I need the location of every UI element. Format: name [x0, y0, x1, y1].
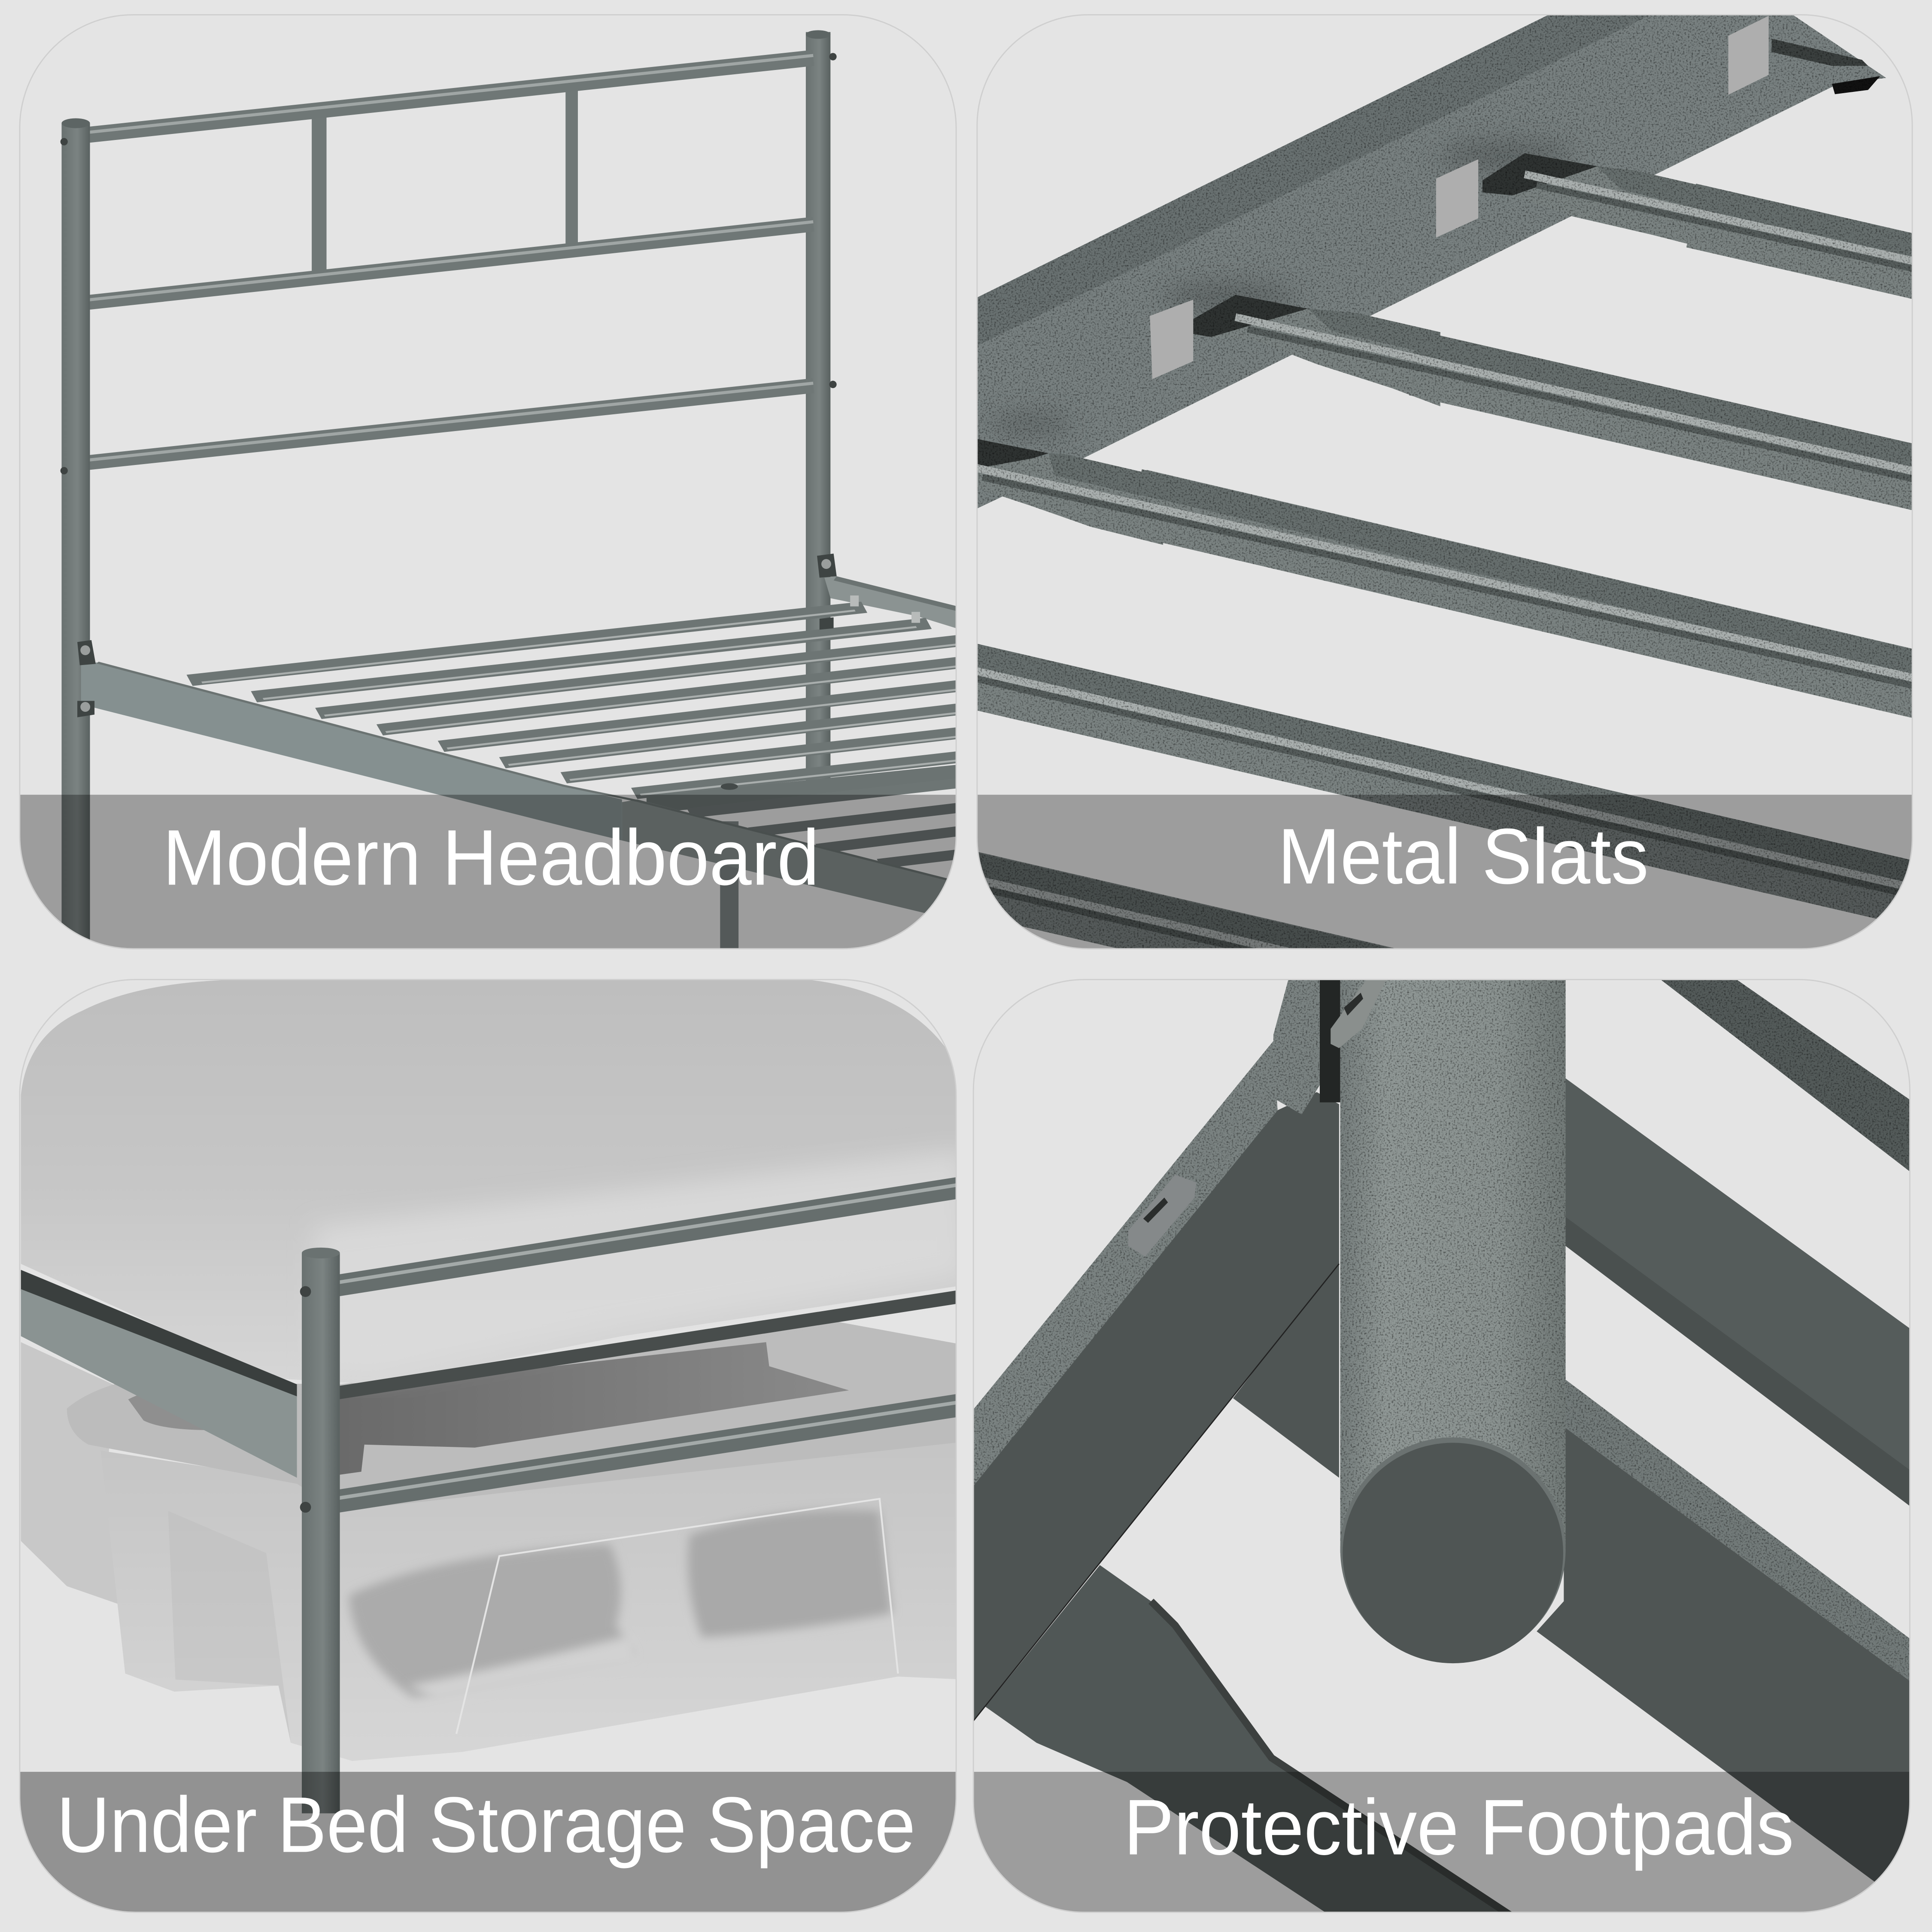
panel: protective footpads: [970, 975, 1916, 1920]
icon: bottom rail: [334, 1401, 966, 1502]
panel background: [20, 980, 956, 1912]
icon: slat A: [1482, 153, 1932, 276]
icon: cloth fold: [407, 1634, 637, 1701]
lower slat 2: [751, 806, 972, 832]
icon: right post cap: [806, 30, 830, 39]
icon: side rail top edge: [97, 662, 953, 881]
icon: left bar textured edge: [970, 1041, 1278, 1490]
slat 3: [319, 639, 972, 716]
panel background: [973, 980, 1910, 1912]
icon: side rail rear section: [622, 799, 953, 920]
icon: far rail top: [834, 576, 966, 613]
icon: left bar flat face: [970, 1092, 1339, 1725]
icon: side rail front section: [81, 662, 622, 841]
heading: Metal Slats: Metal Slats: [1278, 812, 1649, 900]
icon: bracket bolts: [80, 645, 90, 712]
slat 1: [190, 607, 864, 683]
icon: plate 1: [1150, 300, 1193, 379]
slat 6: [502, 708, 972, 765]
icon: post bolts: [300, 1286, 311, 1513]
panel: metal slats: [970, 9, 1932, 997]
icon: bracket block: [1273, 975, 1321, 1115]
icon: left bar inner face: [1233, 1261, 1339, 1478]
icon: leg post: [1340, 975, 1566, 1553]
heading: Under Bed Storage Space: Under Bed Storage Space: [57, 1780, 915, 1868]
icon: lower leg: [720, 821, 738, 958]
icon: far slat end: [1772, 39, 1880, 94]
icon: folded clothes left: [349, 1544, 634, 1698]
icon: slat B: [1193, 295, 1932, 486]
lower slats: [690, 782, 972, 864]
slat 2: [254, 623, 929, 699]
slat 7: [564, 732, 972, 780]
icon: left headboard post: [61, 118, 90, 949]
slat 5: [441, 684, 972, 748]
icon: rear storage bin: [21, 1342, 119, 1604]
label band: [20, 795, 956, 949]
panel background: [977, 15, 1912, 949]
icon: lid recess: [128, 1391, 236, 1430]
panel: modern headboard: [20, 15, 972, 958]
icon: mattress side face: [315, 1149, 966, 1375]
icon: top rail: [334, 1184, 966, 1286]
icon: storage box body: [100, 1396, 966, 1761]
icon: slat D: [970, 655, 1932, 903]
icon: box lid: [67, 1321, 966, 1511]
icon: lower right bar underside: [1537, 1427, 1916, 1920]
icon: side rail: [21, 1270, 297, 1478]
icon: mattress: [21, 979, 966, 1384]
icon: rail underside face: [970, 9, 1886, 512]
lower slat 1: [690, 782, 972, 813]
icon: box left recess: [168, 1511, 291, 1743]
icon: headboard rails and uprights: [81, 55, 813, 463]
icon: far right bracket lower: [820, 617, 834, 630]
icon: slat C: [970, 437, 1932, 693]
icon: plate 3: [1728, 16, 1769, 95]
label band: [20, 1772, 956, 1912]
icon: centre bolt: [721, 783, 738, 790]
icon: upper right tube: [1654, 975, 1916, 1176]
panel outline: [973, 980, 1910, 1912]
icon: box front window outline: [456, 1499, 898, 1734]
heading: Modern Headboard: Modern Headboard: [163, 814, 819, 902]
icon: right headboard post: [806, 32, 830, 796]
icon: lid inner dark tray: [340, 1342, 849, 1475]
icon: left bracket upper: [77, 640, 96, 665]
icon: lower right bar edge: [1564, 1378, 1916, 1686]
icon: seam line: [970, 1264, 1339, 1725]
icon: headboard bolts: [61, 53, 837, 474]
icon: rail bolt: [1128, 1175, 1196, 1257]
icon: lower rails: [334, 1184, 966, 1502]
label band: [977, 795, 1912, 949]
icon: right tube: [1564, 1077, 1916, 1511]
slat 8: [634, 756, 972, 795]
icon: footpad: [1340, 1437, 1566, 1663]
heading: Protective Footpads: Protective Footpads: [1124, 1783, 1794, 1871]
icon: plate 2: [1436, 159, 1478, 237]
icon: slat tab plates: [850, 595, 920, 623]
icon: slat E: [970, 863, 1452, 997]
icon: left bracket lower: [77, 701, 94, 717]
icon: rail top face: [970, 9, 1663, 349]
icon: right bracket upper: [817, 553, 837, 577]
panel outline: [977, 15, 1912, 949]
lower slat 4: [880, 853, 972, 864]
slat 4: [380, 661, 972, 732]
icon: far side rail: [824, 576, 966, 631]
panel outline: [20, 15, 956, 949]
icon: front post: [302, 1248, 340, 1814]
slats: [190, 607, 972, 795]
lower slat 3: [818, 829, 972, 849]
icon: centre cross beam: [647, 764, 966, 813]
icon: dark gap: [1320, 975, 1340, 1103]
panel: under bed storage space: [20, 979, 966, 1912]
label band: [973, 1772, 1910, 1912]
panel outline: [20, 980, 956, 1912]
icon: lower left bar: [985, 1565, 1519, 1920]
panel background: [20, 15, 956, 949]
icon: right bracket bolt: [821, 559, 831, 569]
icon: shadow behind slats: [988, 142, 1573, 434]
icon: folded clothes right: [688, 1510, 892, 1637]
bed deck: slats and rails: [77, 553, 972, 958]
icon: mid rail: [334, 1296, 966, 1393]
icon: bracket bolt: [1331, 978, 1387, 1048]
